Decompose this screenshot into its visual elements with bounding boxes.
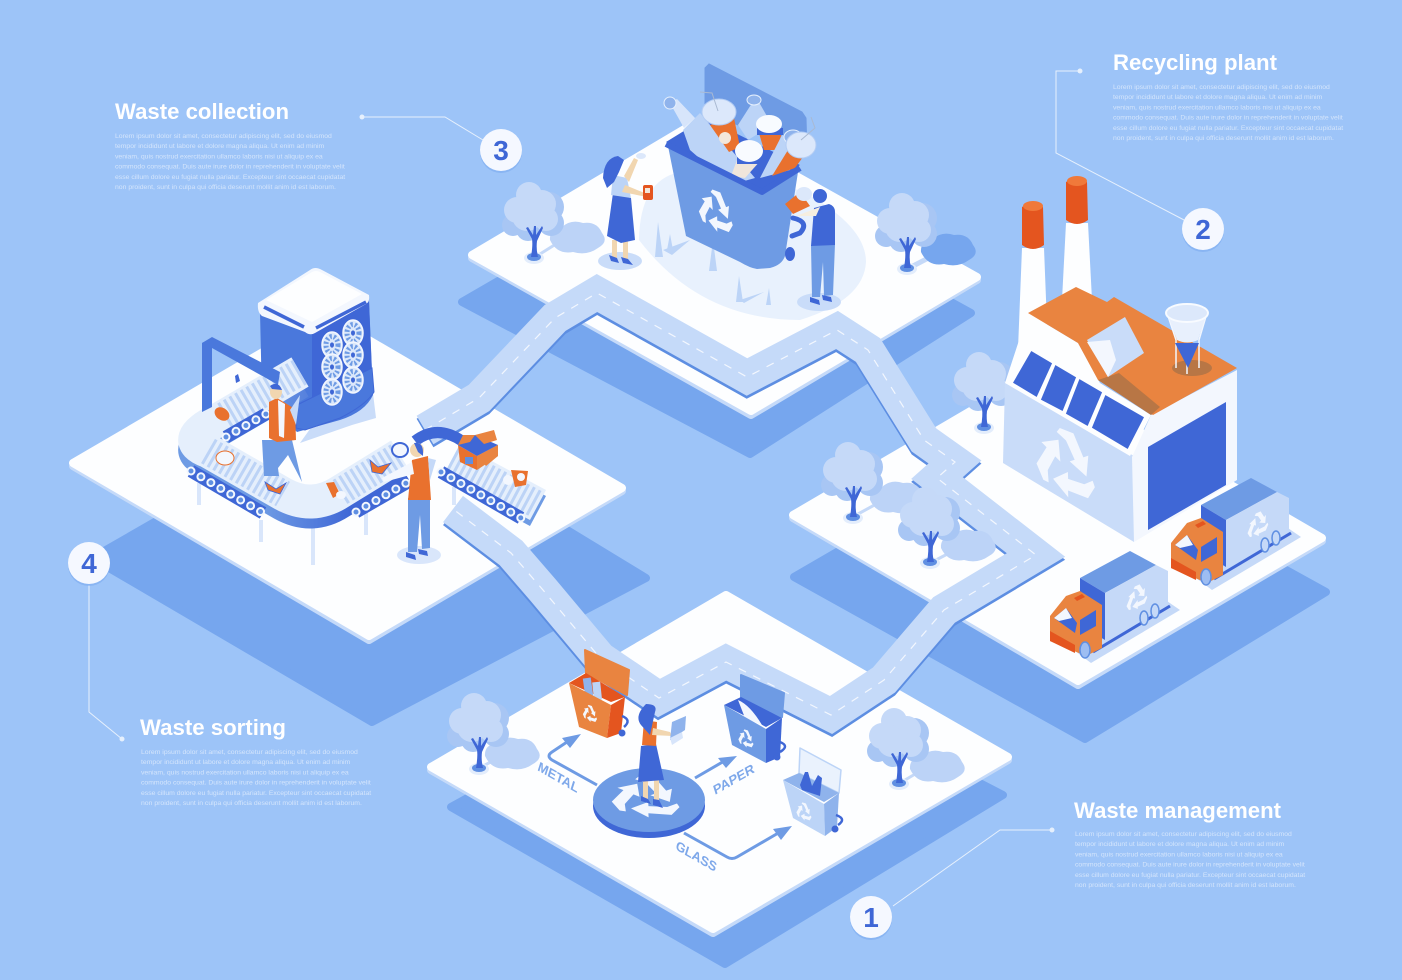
person: woman with tablet [638, 704, 686, 808]
callout 2: 2 [1195, 214, 1211, 245]
arrow heads [562, 734, 792, 840]
building end wall [1132, 370, 1237, 542]
bin contents [664, 92, 816, 185]
grass spikes [655, 222, 771, 305]
text block: waste management: veniam, quis nostrud exercitation ullamco laboris nisi ut aliquip ex ea [1075, 851, 1283, 858]
bin opening [666, 118, 800, 192]
heading: Waste management: Waste management [1074, 798, 1282, 823]
icon: recycle on wall [1029, 416, 1096, 517]
callout 2 [1056, 68, 1224, 252]
text block: waste collection: esse cillum dolore eu fugiat nulla pariatur. Excepteur sint occaecat cupidatat [115, 174, 345, 181]
text block: waste collection [115, 133, 345, 191]
text block: waste collection: Lorem ipsum dolor sit amet, consectetur adipiscing elit, sed do eiusmod [115, 133, 332, 140]
text block: waste management: Lorem ipsum dolor sit amet, consectetur adipiscing elit, sed do eiusmod [1075, 831, 1292, 838]
recycling bin scene [598, 64, 866, 320]
platform shadows [92, 164, 1326, 964]
text block: waste sorting: esse cillum dolore eu fugiat nulla pariatur. Excepteur sint occaecat cupidatat [141, 790, 371, 797]
machine cap [258, 268, 369, 334]
text block: waste sorting: commodo consequat. Duis aute irure dolor in reprehenderit in voluptate velit [141, 780, 371, 787]
gantry [202, 337, 280, 412]
text block: recycling plant: commodo consequat. Duis aute irure dolor in reprehenderit in voluptate velit [1113, 115, 1343, 122]
building left wall [1003, 383, 1134, 542]
conveyor legs [199, 483, 454, 565]
text block: waste collection: non proident, sunt in culpa qui officia deserunt mollit anim id est laborum. [115, 184, 336, 191]
machine base [296, 368, 374, 430]
text block: waste management: non proident, sunt in culpa qui officia deserunt mollit anim id est laborum. [1075, 882, 1296, 889]
bin lid [705, 64, 807, 152]
waste sorting station [536, 650, 842, 875]
sorting arrows [549, 740, 780, 858]
callout 4: 4 [81, 548, 97, 579]
round sorting pad [593, 768, 705, 838]
text block: waste sorting: tempor incididunt ut labore et dolore magna aliqua. Ut enim ad minim [141, 759, 351, 766]
callout 1: 1 [863, 902, 879, 933]
items on belt [212, 404, 528, 499]
text block: waste sorting: non proident, sunt in culpa qui officia deserunt mollit anim id est laborum. [141, 800, 362, 807]
roof [1028, 287, 1237, 415]
skylight [1087, 317, 1144, 377]
text block: waste collection: veniam, quis nostrud exercitation ullamco laboris nisi ut aliquip ex ea [115, 153, 323, 160]
text block: waste collection: tempor incididunt ut labore et dolore magna aliqua. Ut enim ad minim [115, 143, 325, 150]
text block: recycling plant: esse cillum dolore eu fugiat nulla pariatur. Excepteur sint occaecat cupidatat [1113, 125, 1343, 132]
label: glass: GLASS [674, 838, 719, 875]
person: worker at belt [382, 443, 441, 564]
factory [1003, 176, 1237, 542]
label: metal: METAL [536, 759, 581, 796]
road [425, 293, 1036, 718]
text block: recycling plant: non proident, sunt in culpa qui officia deserunt mollit anim id est laborum. [1113, 135, 1334, 142]
heading: Waste sorting: Waste sorting [140, 715, 286, 740]
callout 1 [850, 828, 1054, 940]
chimneys [1016, 176, 1092, 400]
funnel on roof [1166, 304, 1212, 376]
plant door [1148, 402, 1226, 530]
person: woman with cup [598, 153, 653, 270]
icon: tree plant centre [898, 487, 996, 569]
cardboard box [458, 430, 498, 470]
gable front wall [1005, 313, 1151, 456]
truck back [1171, 478, 1301, 590]
solar panels [1012, 350, 1145, 450]
bin: metal [569, 650, 629, 738]
icon: tree top right [875, 193, 976, 275]
text block: waste sorting: Lorem ipsum dolor sit amet, consectetur adipiscing elit, sed do eiusmod [141, 749, 358, 756]
truck front [1050, 551, 1180, 663]
panel: waste management platform [431, 595, 1008, 933]
text block: recycling plant: tempor incididunt ut labore et dolore magna aliqua. Ut enim ad minim [1113, 94, 1323, 101]
machine body [260, 300, 373, 432]
label: paper: PAPER [711, 760, 756, 798]
text block: waste management: tempor incididunt ut labore et dolore magna aliqua. Ut enim ad minim [1075, 841, 1285, 848]
roof shadow [1098, 373, 1160, 415]
text block: waste sorting: veniam, quis nostrud exercitation ullamco laboris nisi ut aliquip ex ea [141, 769, 349, 776]
text block: recycling plant [1113, 84, 1343, 142]
roller bands [191, 414, 521, 518]
text block: recycling plant: veniam, quis nostrud exercitation ullamco laboris nisi ut aliquip ex ea [1113, 104, 1321, 111]
callout 4 [68, 542, 124, 742]
text block: recycling plant: Lorem ipsum dolor sit amet, consectetur adipiscing elit, sed do eiusmod [1113, 84, 1330, 91]
icon: tree top left [502, 182, 605, 264]
bin: glass [783, 748, 842, 836]
callout 3: 3 [493, 135, 509, 166]
text block: waste sorting [141, 749, 371, 807]
fans [322, 320, 363, 405]
panel: waste collection platform [472, 121, 977, 415]
conveyor belt [191, 372, 538, 565]
machine shadow [300, 385, 376, 443]
heading: Waste collection: Waste collection [115, 99, 289, 124]
panel: waste sorting conveyor platform [73, 315, 622, 640]
icon: recycle on bin [695, 183, 734, 243]
text block: waste management: esse cillum dolore eu fugiat nulla pariatur. Excepteur sint occaecat cupidatat [1075, 872, 1305, 879]
bin body [668, 146, 798, 269]
person: man with cup [785, 187, 841, 311]
panel: recycling plant platform [793, 372, 1322, 685]
person: worker at machine [262, 384, 302, 482]
text block: waste collection: commodo consequat. Duis aute irure dolor in reprehenderit in voluptate velit [115, 164, 345, 171]
text block: waste management: commodo consequat. Duis aute irure dolor in reprehenderit in voluptate velit [1075, 862, 1305, 869]
icon: tree plant left [821, 442, 925, 524]
bin: paper [724, 675, 785, 763]
icon: tree near factory [952, 352, 1014, 434]
heading: Recycling plant: Recycling plant [1113, 50, 1278, 75]
text block: waste management [1075, 831, 1305, 889]
icon: tree bottom left [447, 693, 540, 775]
sorting machine [258, 268, 376, 443]
icon: tree bottom right [867, 708, 965, 790]
callout 3 [360, 114, 522, 173]
